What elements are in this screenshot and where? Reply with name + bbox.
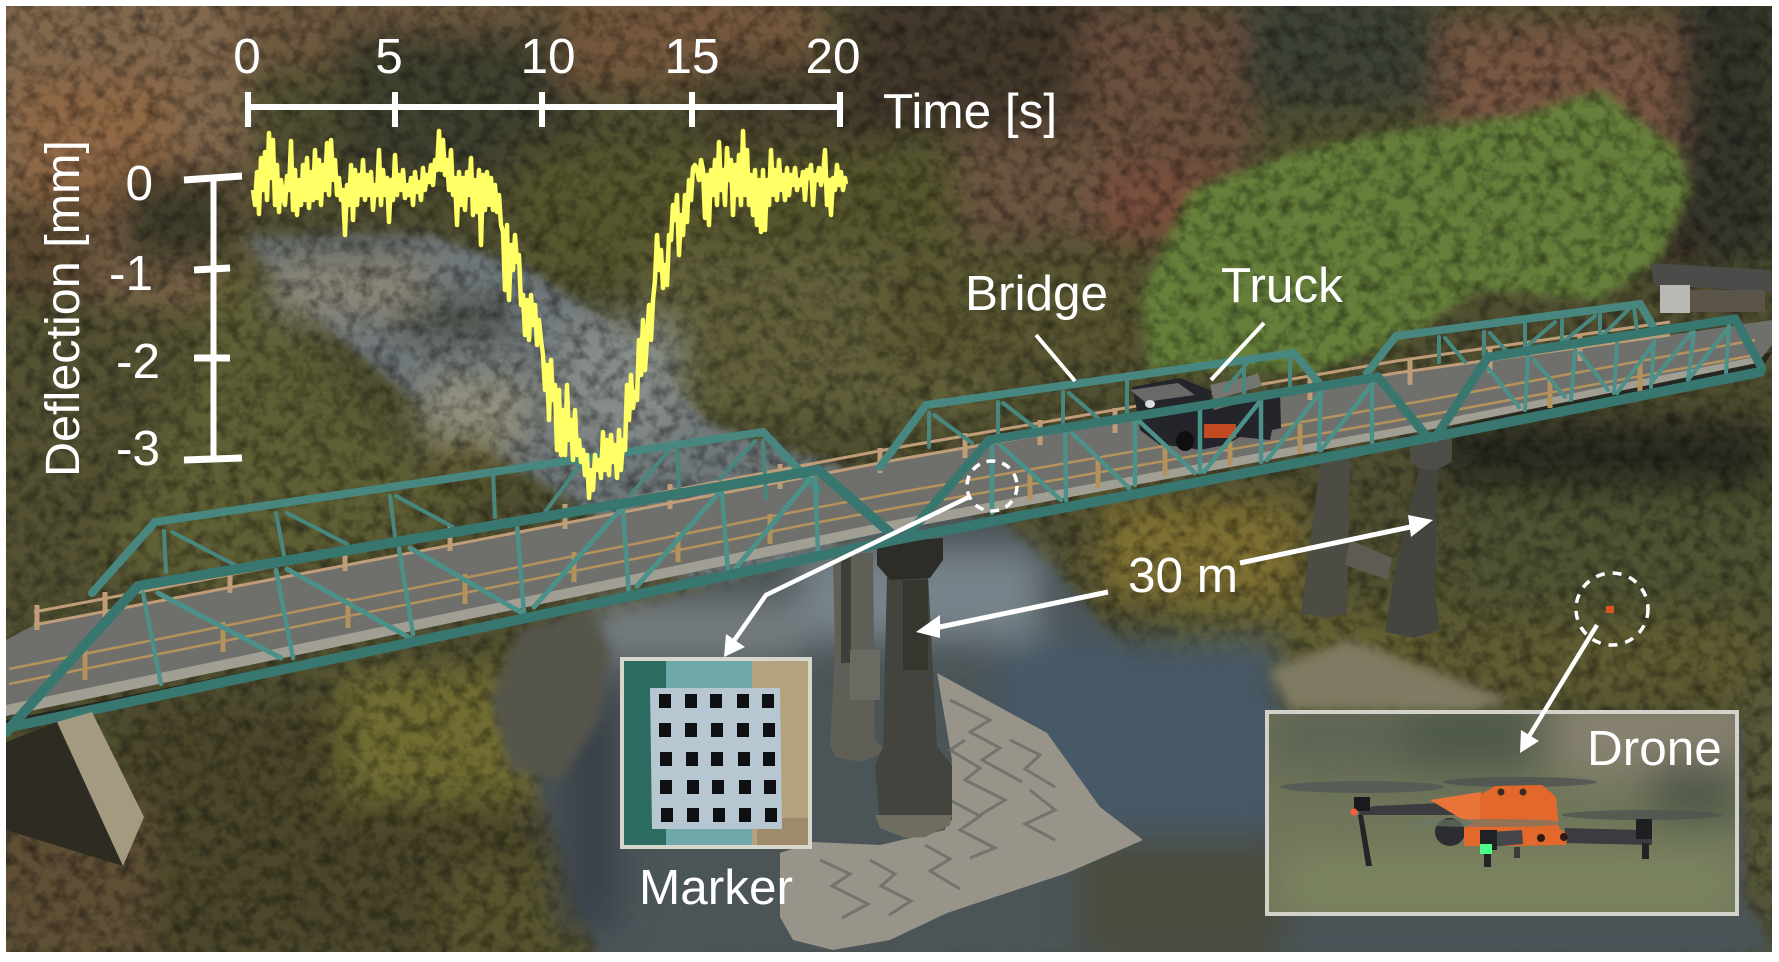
bridge piers: [830, 438, 1452, 838]
upper river: [244, 235, 880, 590]
bamboo grove: [1140, 90, 1690, 372]
left abutment: [6, 712, 144, 866]
drone inset: [1265, 700, 1750, 920]
time tick labels: 10: [520, 29, 576, 84]
deflection tick labels: -3: [116, 421, 160, 476]
far pier right: [1301, 457, 1392, 618]
far railing: [34, 322, 1670, 630]
label: Drone: Drone: [1587, 721, 1722, 776]
dashed circle: drone location: [1576, 573, 1648, 645]
bridge deck: [6, 320, 1772, 728]
marker holes: [659, 694, 777, 822]
label: 30 m: 30 m: [1128, 548, 1238, 603]
bridge steel truss: [6, 304, 1762, 732]
deflection tick labels: -1: [109, 246, 153, 301]
time tick labels: [233, 29, 861, 84]
time axis title: Time [s]: [883, 84, 1057, 139]
time tick labels: 20: [805, 29, 861, 84]
arrow: drone: [1520, 625, 1597, 753]
deflection tick labels: -2: [116, 334, 160, 389]
label: Bridge: Bridge: [965, 266, 1108, 321]
near railing: [9, 340, 1755, 684]
time tick labels: 5: [375, 29, 403, 84]
leader: Bridge: [1036, 335, 1075, 381]
truck: [1130, 373, 1281, 451]
label: Marker: Marker: [639, 860, 793, 915]
arrow: marker: [724, 497, 969, 657]
drone aircraft: [1280, 777, 1722, 867]
time axis: [233, 29, 861, 127]
deflection tick labels: 0: [125, 156, 153, 211]
arrow: 30 m left: [916, 592, 1108, 638]
house on right bank: [1650, 263, 1772, 313]
deflection tick labels: [109, 156, 160, 476]
time tick labels: 0: [233, 29, 261, 84]
arrow: 30 m right: [1240, 515, 1433, 563]
dashed circle: marker location: [967, 461, 1017, 511]
leader: Truck: [1211, 323, 1264, 380]
marker plate: [650, 688, 782, 829]
concrete armour blocks: [780, 673, 1143, 950]
deflection axis: [109, 156, 242, 476]
river stones: [490, 610, 1510, 780]
drone frame: [1267, 712, 1737, 914]
lower river: [490, 500, 1772, 962]
near pier right: [1385, 438, 1452, 638]
near trusses: [143, 325, 1729, 684]
deflection axis title: Deflection [mm]: [36, 140, 90, 477]
marker inset: [622, 659, 810, 847]
time tick labels: 15: [664, 29, 720, 84]
label: Truck: Truck: [1221, 258, 1343, 313]
far trusses: [92, 304, 1654, 593]
deflection time series: [253, 131, 846, 498]
far pier left: [830, 553, 883, 762]
near pier left: [875, 538, 952, 838]
